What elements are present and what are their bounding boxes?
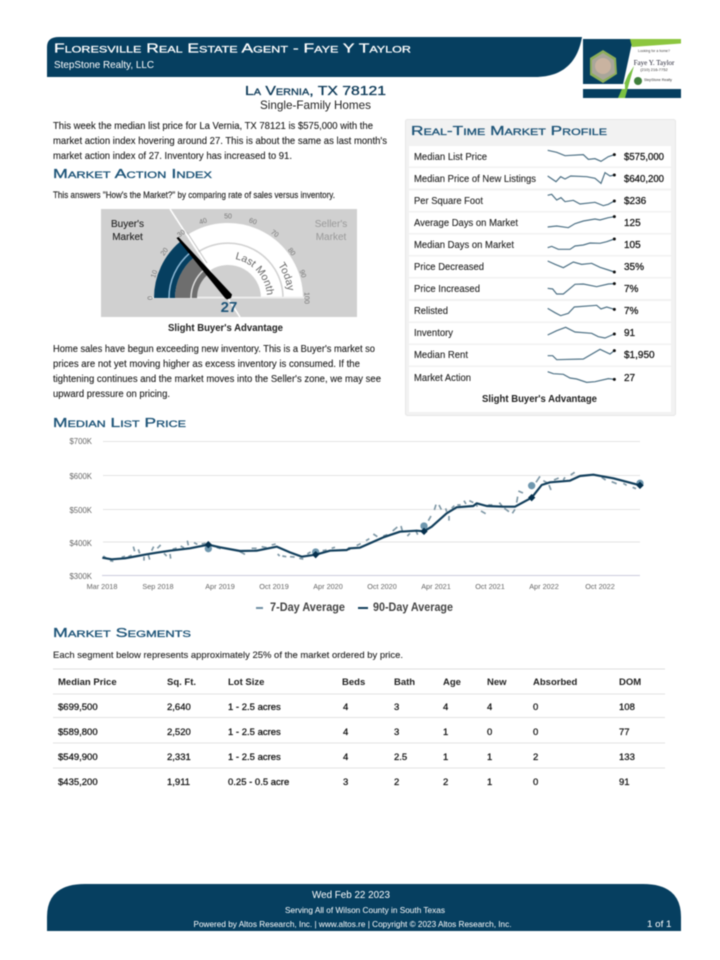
- x axis labels: Apr 2022: [529, 582, 559, 591]
- gauge caption: Slight Buyer's Advantage: [168, 323, 283, 334]
- gauge scale: 50: [224, 214, 232, 220]
- agent logo card: (210) 216-7752: [640, 67, 668, 72]
- table row 1: 4: [343, 702, 348, 713]
- profile metric values: 35%: [624, 262, 644, 273]
- profile metric values: $640,200: [624, 174, 664, 185]
- table row 1: 4: [443, 702, 448, 713]
- table row 2: [58, 727, 630, 738]
- table row 1: [58, 702, 635, 713]
- market commentary paragraph: upward pressure on pricing.: [53, 388, 170, 400]
- today ring label: Today: [279, 261, 294, 291]
- agent logo card: Faye Y. Taylor: [634, 59, 675, 67]
- x axis labels: [87, 582, 615, 591]
- table row 3: 2: [533, 752, 538, 763]
- profile metric labels: Median List Price: [414, 152, 487, 163]
- x axis labels: Oct 2020: [367, 582, 397, 591]
- segments description: Each segment below represents approximately 25% of the market ordered by price.: [53, 650, 403, 661]
- table row 2: 0: [487, 727, 492, 738]
- buyer's market label: Market: [112, 232, 143, 243]
- 7-day average series: [103, 472, 636, 561]
- panel: real-time market profile: [406, 120, 676, 416]
- table row 1: $699,500: [58, 702, 98, 713]
- x axis labels: Apr 2020: [313, 582, 343, 591]
- table row 3: 1 - 2.5 acres: [228, 752, 281, 763]
- intro paragraph: market action index hovering around 27. This is about the same as last month's: [53, 135, 387, 147]
- table row 4: $435,200: [58, 777, 98, 788]
- profile metric labels: Median Rent: [414, 350, 468, 361]
- line chart: median list price: [69, 437, 644, 614]
- gauge scale: 30: [176, 229, 187, 239]
- table row 3: [58, 752, 635, 763]
- y axis labels: $600K: [69, 472, 93, 481]
- profile metric labels: Median Price of New Listings: [414, 174, 536, 185]
- agent logo card: StepStone Realty: [644, 78, 672, 82]
- x axis labels: Oct 2021: [475, 582, 505, 591]
- profile metric labels: Relisted: [414, 306, 448, 317]
- profile metric labels: Average Days on Market: [414, 218, 518, 229]
- table row 4: 0: [533, 777, 538, 788]
- property type subtitle: Single-Family Homes: [260, 98, 371, 112]
- market commentary paragraph: prices are not yet moving higher as excess inventory is consumed. If the: [53, 358, 360, 370]
- profile metric labels: [414, 152, 536, 384]
- gauge scale: 70: [269, 229, 280, 239]
- table row 1: 1 - 2.5 acres: [228, 702, 281, 713]
- table row 2: 2,520: [167, 727, 191, 738]
- gauge value: 27: [221, 299, 237, 316]
- gauge scale: 80: [286, 247, 296, 257]
- intro paragraph: [53, 120, 387, 162]
- x axis labels: Apr 2021: [421, 582, 451, 591]
- profile metric labels: Price Decreased: [414, 262, 484, 273]
- table row 1: 2,640: [167, 702, 191, 713]
- gauge scale: 40: [198, 217, 208, 226]
- table row 3: $549,900: [58, 752, 98, 763]
- x axis labels: Oct 2022: [585, 582, 615, 591]
- 90-day average series: [102, 475, 640, 559]
- page number: 1 of 1: [647, 919, 672, 930]
- table row 3: 1: [443, 752, 448, 763]
- profile metric values: 7%: [624, 284, 639, 295]
- footer banner: [47, 884, 681, 931]
- table row 3: 1: [487, 752, 492, 763]
- table header row: Absorbed: [533, 677, 578, 688]
- profile metric values: $236: [624, 196, 647, 207]
- intro paragraph: This week the median list price for La Vernia, TX 78121 is $575,000 with the: [53, 120, 373, 132]
- gauge chart: [100, 208, 358, 318]
- table row 4: 1,911: [167, 777, 190, 788]
- y axis labels: $700K: [69, 437, 93, 446]
- data series: [102, 472, 644, 561]
- table header row: New: [487, 677, 507, 688]
- chart legend: 7-Day Average: [270, 602, 345, 614]
- panel heading: Real-Time Market Profile: [411, 124, 607, 138]
- y axis labels: [69, 437, 93, 581]
- table row 2: 1 - 2.5 acres: [228, 727, 281, 738]
- profile metric values: $575,000: [624, 152, 664, 163]
- table row 2: 77: [619, 727, 630, 738]
- market action description: This answers "How's the Market?" by comparing rate of sales versus inventory.: [53, 190, 335, 200]
- header banner: [47, 37, 582, 77]
- table row 2: 3: [394, 727, 399, 738]
- seller's market label: Market: [316, 232, 347, 243]
- chart legend: [256, 602, 453, 614]
- profile metric values: $1,950: [624, 350, 655, 361]
- x axis labels: Oct 2019: [259, 582, 289, 591]
- table row 4: 2: [394, 777, 399, 788]
- gauge scale: 60: [248, 217, 258, 226]
- table row 2: 4: [343, 727, 348, 738]
- heading: market segments: Market Segments: [53, 626, 191, 640]
- profile metric labels: Per Square Foot: [414, 196, 483, 207]
- table row 3: 2,331: [167, 752, 191, 763]
- table row 4: 0.25 - 0.5 acre: [228, 777, 289, 788]
- agent logo card: Looking for a home?: [638, 49, 670, 53]
- market commentary paragraph: Home sales have begun exceeding new inventory. This is a Buyer's market so: [53, 343, 375, 355]
- gauge scale: [148, 214, 310, 304]
- profile metric labels: Inventory: [414, 328, 453, 339]
- profile metric values: 125: [624, 218, 641, 229]
- profile sparklines: [548, 150, 616, 382]
- market commentary paragraph: tightening continues and the market moves into the Seller's zone, we may see: [53, 373, 381, 385]
- table row 3: 4: [343, 752, 348, 763]
- heading: median list price: Median List Price: [53, 416, 186, 430]
- x axis labels: Sep 2018: [142, 582, 174, 591]
- agent logo card: [583, 39, 681, 98]
- market commentary paragraph: [53, 343, 381, 400]
- table row 4: [58, 777, 630, 788]
- 90-day markers: [205, 482, 644, 558]
- gauge scale: 100: [302, 292, 310, 304]
- profile metric values: 91: [624, 328, 636, 339]
- chart legend: 90-Day Average: [373, 602, 453, 614]
- table row 2: $589,800: [58, 727, 98, 738]
- table header row: Lot Size: [228, 677, 264, 688]
- gauge scale: 0: [148, 296, 154, 300]
- table: market segments: [53, 669, 665, 788]
- table row 1: 0: [533, 702, 538, 713]
- profile metric values: 7%: [624, 306, 639, 317]
- y axis labels: $300K: [69, 572, 93, 581]
- table row 4: 3: [343, 777, 348, 788]
- gauge scale: 10: [150, 269, 159, 279]
- profile metric labels: Price Increased: [414, 284, 480, 295]
- monthly 7-day markers: [205, 480, 644, 556]
- table row 1: 108: [619, 702, 635, 713]
- table row 3: 2.5: [394, 752, 407, 763]
- x axis labels: Mar 2018: [87, 582, 117, 591]
- last month ring label: Last Month: [235, 252, 274, 296]
- table header row: Beds: [342, 677, 365, 688]
- profile metric labels: Median Days on Market: [414, 240, 514, 251]
- table row 1: 3: [394, 702, 399, 713]
- table header row: Bath: [394, 677, 415, 688]
- table header row: Sq. Ft.: [167, 677, 196, 688]
- intro paragraph: market action index of 27. Inventory has increased to 91.: [53, 150, 292, 162]
- profile metric values: [624, 152, 664, 384]
- x axis labels: Apr 2019: [205, 582, 235, 591]
- table header row: Age: [443, 677, 461, 688]
- table header row: [58, 677, 641, 688]
- profile metric values: 27: [624, 373, 636, 384]
- gauge scale: 20: [160, 247, 170, 257]
- table row 4: 1: [487, 777, 492, 788]
- profile metric values: 105: [624, 240, 641, 251]
- table row 1: 4: [487, 702, 492, 713]
- buyer's market label: Buyer's: [111, 219, 144, 230]
- location title: La Vernia, TX 78121: [245, 83, 386, 98]
- profile verdict: Slight Buyer's Advantage: [482, 394, 597, 405]
- heading: market action index: Market Action Index: [53, 167, 212, 181]
- table row 2: 0: [533, 727, 538, 738]
- copyright line: Powered by Altos Research, Inc. | www.altos.re | Copyright © 2023 Altos Research, Inc.: [194, 919, 512, 929]
- header title: Floresville Real Estate Agent - Faye Y Taylor: [54, 42, 412, 56]
- table header row: Median Price: [58, 677, 117, 688]
- y axis labels: $400K: [69, 539, 93, 548]
- report date: Wed Feb 22 2023: [312, 890, 390, 901]
- seller's market label: Seller's: [315, 219, 347, 230]
- table row 4: 91: [619, 777, 630, 788]
- table row 4: 2: [443, 777, 448, 788]
- y axis labels: $500K: [69, 506, 93, 515]
- table row 2: 1: [443, 727, 448, 738]
- service area: Serving All of Wilson County in South Texas: [285, 905, 445, 915]
- table header row: DOM: [619, 677, 641, 688]
- profile metric labels: Market Action: [414, 373, 471, 384]
- brokerage name: StepStone Realty, LLC: [54, 59, 154, 71]
- gauge scale: 90: [298, 269, 307, 279]
- table row 3: 133: [619, 752, 635, 763]
